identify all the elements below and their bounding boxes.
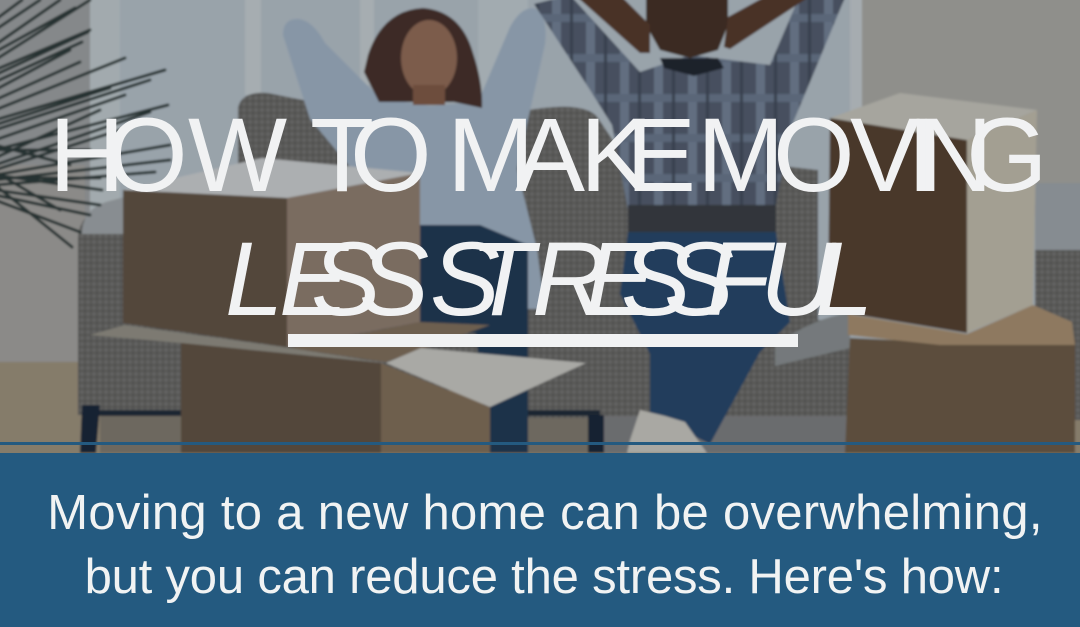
- wall: [0, 0, 1080, 370]
- box bottom left: [90, 325, 385, 363]
- box right bottom: [845, 338, 1075, 453]
- title line 1: HOWTOMAKEMOVING: [49, 97, 1048, 214]
- box right top: [828, 118, 967, 333]
- divider line: [0, 442, 1080, 445]
- intro text: [47, 486, 1043, 604]
- title: [49, 97, 1048, 338]
- box left on sofa: [123, 190, 287, 347]
- man: [534, 0, 846, 210]
- floor: [0, 362, 1080, 457]
- woman: [283, 8, 546, 309]
- plant: [0, 0, 170, 247]
- title underline: [288, 334, 798, 347]
- intro text: but you can reduce the stress. Here's how:: [85, 550, 1003, 604]
- sofa: [238, 93, 818, 390]
- title line 2: LESSSTRESSFUL: [225, 221, 873, 338]
- intro band: [0, 453, 1080, 627]
- hero photo: couple relaxing on sofa among moving boxes: [0, 0, 1080, 453]
- intro text: Moving to a new home can be overwhelming,: [47, 486, 1043, 540]
